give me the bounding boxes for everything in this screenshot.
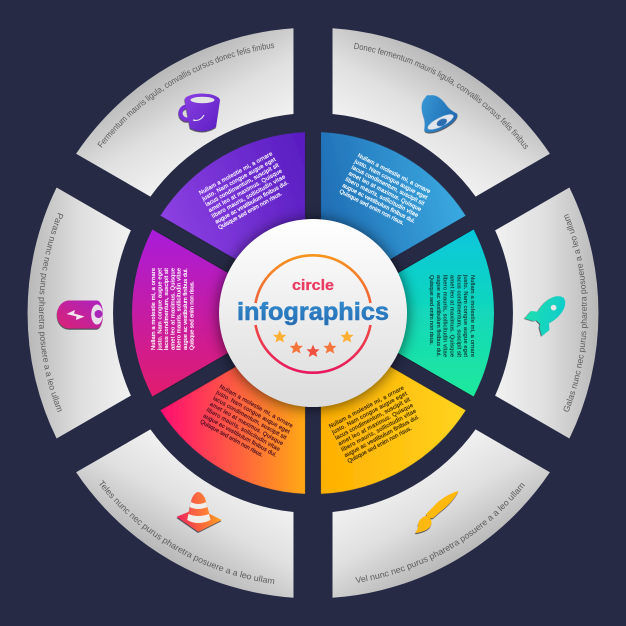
text block: justo. Nam congue augue eget (462, 274, 468, 357)
curved caption: Teles nunc nec purus pharetra posuere a a leo ullam (100, 480, 274, 584)
text block: Nullam a molestie mi, a ornare (328, 385, 405, 430)
text block: Quisque sed enim non risus. (338, 189, 405, 227)
text block: libero mauris, sollicitudin vitae (211, 174, 287, 220)
panel: inner left (132, 230, 240, 396)
text block: lacus condimentum, suscipit sit (164, 268, 170, 350)
inner segment shape (386, 230, 494, 396)
text block: libero mauris, sollicitudin vitae (205, 407, 281, 453)
text block: augue ac vestibulum finibus dui. (344, 414, 421, 459)
outer segment shape (62, 3, 331, 218)
text block: augue ac vestibulum finibus dui. (202, 413, 278, 459)
logo word: infographics: infographics (237, 298, 389, 326)
text block: amet leo at maximus. Quisque (337, 403, 414, 447)
outer segment shape (28, 188, 131, 438)
panel: inner bottom right (277, 334, 476, 512)
text block: lacus condimentum, suscipit sit (350, 165, 425, 207)
text block: Nullam a molestie mi, a ornare (356, 153, 431, 195)
text block (428, 274, 475, 357)
icon: paint brush (415, 491, 458, 533)
text block: libero mauris, sollicitudin vitae (344, 177, 419, 219)
stars (273, 330, 354, 357)
center badge (219, 219, 407, 407)
panel: outer bottom right (332, 429, 550, 598)
curved caption: Paras nunc nec purus pharetra posuere a a leo ullam (38, 212, 64, 412)
text block: Quisque sed enim non risus. (190, 281, 196, 350)
icon: bucket (180, 94, 220, 131)
outer segment shape (495, 188, 598, 438)
outer segment shape (295, 408, 564, 623)
inner segment shape (132, 230, 240, 396)
panel: inner top right (277, 114, 476, 292)
text block (337, 153, 432, 231)
text block: lacus condimentum, suscipit sit (334, 397, 412, 442)
text block: augue ac vestibulum finibus dui. (183, 268, 189, 350)
outer segment shape (62, 408, 331, 623)
logo word: circle: circle (292, 277, 334, 294)
panel: inner bottom left (150, 334, 349, 512)
text block (327, 385, 424, 465)
text block: augue ac vestibulum finibus dui. (341, 183, 416, 225)
text block: amet leo at maximus. Quisque (347, 171, 422, 213)
inner segment shape (277, 334, 476, 512)
inner segment shape (150, 334, 349, 512)
text block: Nullam a molestie mi, a ornare (469, 275, 475, 357)
curved caption: Vel nunc nec purus pharetra posuere a a leo ullam (355, 483, 525, 583)
text block: justo. Nam congue augue eget (158, 268, 164, 351)
inner segment shape (150, 114, 349, 292)
logo ring (256, 255, 370, 373)
text block: libero mauris, sollicitudin vitae (177, 268, 183, 350)
panel: outer bottom left (76, 429, 294, 598)
icon: traffic cone (177, 492, 222, 532)
text block: Quisque sed enim non risus. (199, 419, 264, 459)
text block: Quisque sed enim non risus. (217, 191, 284, 231)
panel: outer right (495, 188, 598, 438)
panel: outer left (28, 188, 131, 438)
text block: lacus condimentum, suscipit sit (212, 396, 288, 441)
icon: rocket (524, 288, 573, 337)
inner segment shape (277, 114, 476, 292)
text block: augue ac vestibulum finibus dui. (214, 180, 290, 226)
text block: justo. Nam congue augue eget (214, 389, 291, 436)
curved caption: Fermentum mauris ligula, convallis cursus donec felis finibus (98, 43, 274, 148)
outer segment shape (295, 3, 564, 218)
panel: inner right (386, 230, 494, 396)
center disc (219, 219, 407, 407)
center disc shadow (218, 219, 408, 409)
text block (197, 151, 293, 232)
icon: battery (57, 300, 103, 328)
icon: bell (411, 87, 460, 137)
text block: amet leo at maximus. Quisque (208, 168, 283, 214)
text block: lacus condimentum, suscipit sit (205, 163, 281, 208)
text block: lacus condimentum, suscipit sit (455, 275, 461, 357)
panel: inner top left (150, 114, 349, 292)
text block: justo. Nam congue augue eget (201, 157, 277, 203)
text block: Nullam a molestie mi, a ornare (151, 268, 157, 350)
text block: Nullam a molestie mi, a ornare (218, 384, 294, 430)
curved caption: Galas nunc nec purus pharetra posuere a a leo ullam (564, 214, 588, 412)
text block: justo. Nam congue augue eget (352, 159, 429, 201)
text block: libero mauris, sollicitudin vitae (442, 275, 448, 357)
text block: justo. Nam congue augue eget (330, 391, 409, 436)
panel: outer top right (332, 28, 550, 197)
text block: amet leo at maximus. Quisque (208, 402, 284, 447)
curved caption: Donec fermentum mauris ligula, convallis cursus felis finibus (354, 42, 528, 150)
text block: amet leo at maximus. Quisque (448, 275, 454, 357)
text block (151, 268, 196, 351)
text block: Nullam a molestie mi, a ornare (198, 151, 274, 197)
text block: Quisque sed enim non risus. (347, 426, 413, 465)
text block: Quisque sed enim non risus. (428, 275, 434, 345)
text block (198, 384, 294, 465)
text block: augue ac vestibulum finibus dui. (435, 275, 441, 357)
panel: outer top left (76, 28, 294, 197)
text block: libero mauris, sollicitudin vitae (341, 409, 418, 453)
text block: amet leo at maximus. Quisque (170, 268, 176, 350)
